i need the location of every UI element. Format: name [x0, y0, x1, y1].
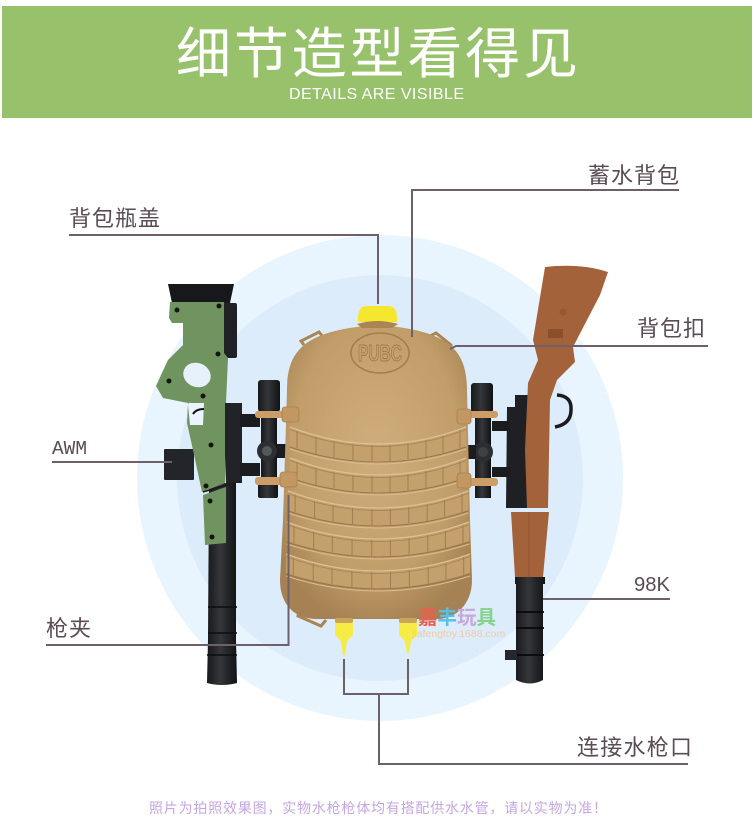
- watermark: 嘉丰玩具: [418, 607, 496, 629]
- water backpack: [280, 306, 472, 655]
- green stock: [156, 302, 228, 492]
- strap tabs: [280, 407, 471, 488]
- left rifle: AWM: [156, 284, 260, 685]
- outlet nozzle right: [399, 618, 417, 653]
- right scope: [468, 383, 498, 498]
- molle rows: [286, 427, 470, 591]
- PUBG emblem: [351, 333, 409, 373]
- right rifle: 98K: [492, 266, 608, 684]
- body shell: [280, 325, 472, 619]
- background circles: [137, 235, 623, 721]
- callout: AWM: AWM: [52, 438, 87, 460]
- watermark: [411, 607, 505, 640]
- callout: 98K: 98K: [634, 574, 671, 596]
- callout: backpack buckle: [450, 316, 708, 349]
- trigger guard: [555, 395, 571, 427]
- receiver: [506, 395, 528, 508]
- footer note: 照片为拍照效果图，实物水枪枪体均有搭配供水水管，请以实物为准！: [149, 800, 607, 816]
- bottle cap: [358, 306, 397, 322]
- callout: water gun connector: 连接水枪口: [577, 735, 692, 760]
- callout: backpack buckle: 背包扣: [637, 316, 705, 341]
- stock: [525, 266, 608, 508]
- watermark: jiafengtoy.1688.com: [411, 628, 505, 640]
- screws: [166, 304, 222, 540]
- callout: backpack cap: 背包瓶盖: [69, 206, 160, 231]
- callout: backpack cap: [69, 206, 378, 304]
- receiver: [225, 403, 242, 483]
- barrel: [207, 483, 237, 685]
- callout: magazine clip: [46, 495, 288, 645]
- trigger guard: [188, 403, 204, 425]
- callout: AWM: [52, 438, 172, 462]
- header banner: [2, 6, 752, 118]
- magazine: [164, 449, 194, 480]
- thumb hole: [180, 359, 214, 391]
- title: 细节造型看得见: [176, 23, 578, 85]
- stock butt: [168, 284, 234, 303]
- subtitle: DETAILS ARE VISIBLE: [289, 86, 464, 103]
- callout: 98K: [543, 574, 671, 599]
- fore-end: [511, 512, 549, 577]
- callout: water backpack: 蓄水背包: [588, 163, 679, 188]
- carry handles: [301, 332, 323, 345]
- callout: water gun connector: [344, 659, 692, 764]
- left scope: [255, 380, 287, 498]
- muzzle tube: [515, 577, 545, 684]
- callout: water backpack: [412, 163, 679, 337]
- outlet nozzle left: [335, 618, 353, 655]
- PUBG emblem: PUBC: [358, 340, 402, 366]
- callout: magazine clip: 枪夹: [46, 616, 91, 641]
